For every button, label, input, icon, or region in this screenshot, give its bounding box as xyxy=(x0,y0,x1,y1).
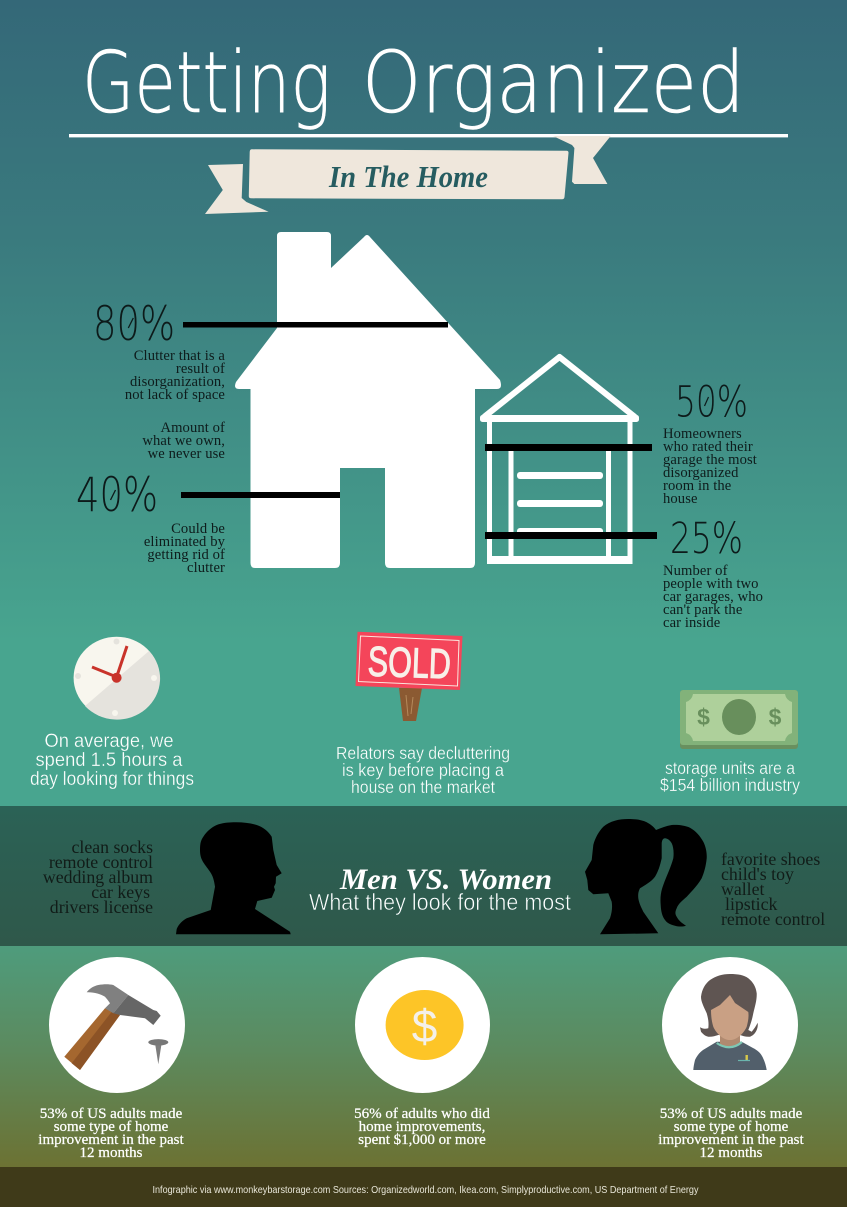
stat: 25% xyxy=(485,514,763,631)
text: storage units: storage units are a xyxy=(665,758,795,778)
stat: 40% xyxy=(76,468,340,576)
stat: 50%: who rated their xyxy=(663,439,753,455)
list: women look for: lipstick xyxy=(725,894,777,914)
stat: 50%: Homeowners xyxy=(663,426,742,442)
stat: 40%: clutter xyxy=(187,560,225,576)
icon: woman silhouette xyxy=(585,819,707,934)
caption: home improvement repeat: 53% of US adults made xyxy=(660,1106,803,1122)
title: Getting xyxy=(82,34,331,133)
caption: home improvement: some type of home xyxy=(54,1119,169,1135)
stat: 80% xyxy=(93,297,448,403)
list: women look for: favorite shoes xyxy=(721,849,820,869)
footer xyxy=(0,1167,847,1207)
text: relators xyxy=(336,743,510,797)
caption: home improvement repeat: 12 months xyxy=(700,1145,763,1161)
stat: 40%: Could be xyxy=(171,521,225,537)
list: women look for: child's toy xyxy=(721,864,794,884)
icon: man silhouette xyxy=(176,822,291,934)
stat: 50%: disorganized xyxy=(663,465,739,481)
panel: men vs women xyxy=(0,806,847,946)
list: women look for: wallet xyxy=(721,879,765,899)
list: men look for: remote control xyxy=(49,852,153,872)
stat: 25%: can't park the xyxy=(663,602,742,618)
caption: home improvement: improvement in the past xyxy=(38,1132,185,1148)
text: storage units: $154 billion industry xyxy=(660,775,800,795)
text: relators: house on the market xyxy=(351,777,495,797)
caption: home improvement repeat xyxy=(658,1106,805,1161)
subheading: What they look for the most xyxy=(309,889,572,915)
note: amount we never use: what we own, xyxy=(142,433,225,449)
note: amount we never use: Amount of xyxy=(160,420,225,436)
stat: 50%: 50% xyxy=(675,378,748,428)
stat: 40%: 40% xyxy=(76,468,158,523)
text: time spent looking xyxy=(30,731,194,790)
title underline xyxy=(69,134,788,137)
caption: spending: spent $1,000 or more xyxy=(358,1132,486,1148)
icon: sold sign xyxy=(356,632,462,721)
title: Organized xyxy=(362,34,745,133)
caption: home improvement xyxy=(38,1106,185,1161)
stat: 80%: not lack of space xyxy=(125,387,225,403)
stat: 25%: Number of xyxy=(663,563,728,579)
list: men look for xyxy=(43,837,153,917)
icon: dollar bill: $ xyxy=(769,704,782,730)
note: amount we never use: we never use xyxy=(148,446,225,462)
heading: men vs women: Men VS. Women xyxy=(339,863,552,896)
icon: dollar bill xyxy=(680,690,798,749)
icon: hammer and nail xyxy=(49,957,185,1093)
footer: Infographic via www.monkeybarstorage.com Sources: Organizedworld.com, Ikea.com, Simplyproductive.com, US Department of Energy xyxy=(152,1184,699,1196)
caption: spending: 56% of adults who did xyxy=(354,1106,490,1122)
stat: 40%: eliminated by xyxy=(144,534,226,550)
text: storage units xyxy=(660,758,800,795)
caption: spending: home improvements, xyxy=(359,1119,485,1135)
ribbon: In The Home: In The Home xyxy=(328,159,488,194)
caption: home improvement: 53% of US adults made xyxy=(40,1106,183,1122)
list: women look for xyxy=(721,849,825,929)
icon: clock xyxy=(74,637,160,720)
icon: coin: $ xyxy=(412,1000,437,1052)
stat: 50%: room in the xyxy=(663,478,731,494)
note: amount we never use xyxy=(142,420,225,462)
caption: home improvement: 12 months xyxy=(80,1145,143,1161)
stat: 80%: disorganization, xyxy=(130,374,225,390)
icon: coin xyxy=(355,957,490,1093)
text: time spent looking: On average, we xyxy=(44,731,174,752)
stat: 80%: Clutter that is a xyxy=(134,348,225,364)
list: men look for: drivers license xyxy=(50,897,153,917)
icon: dollar bill: $ xyxy=(697,704,710,730)
stat: 25%: people with two xyxy=(663,576,759,592)
caption: home improvement repeat: some type of home xyxy=(674,1119,789,1135)
list: men look for: wedding album xyxy=(43,867,153,887)
stat: 50%: garage the most xyxy=(663,452,757,468)
list: men look for: car keys xyxy=(91,882,150,902)
stat: 80%: result of xyxy=(176,361,225,377)
ribbon: In The Home xyxy=(205,136,611,214)
title xyxy=(82,34,745,133)
text: time spent looking: day looking for things xyxy=(30,769,194,790)
list: women look for: remote control xyxy=(721,909,825,929)
list: men look for: clean socks xyxy=(72,837,153,857)
caption: home improvement repeat: improvement in the past xyxy=(658,1132,805,1148)
text: time spent looking: spend 1.5 hours a xyxy=(36,750,183,771)
stat: 50% xyxy=(485,378,757,507)
stat: 40%: getting rid of xyxy=(147,547,225,563)
stat: 25%: 25% xyxy=(670,514,743,564)
icon: garage xyxy=(480,357,639,562)
stat: 25%: car inside xyxy=(663,615,720,631)
stat: 50%: house xyxy=(663,491,698,507)
icon: sold sign: SOLD xyxy=(367,638,452,687)
caption: spending xyxy=(354,1106,490,1148)
text: relators: is key before placing a xyxy=(342,760,504,780)
icon: woman portrait xyxy=(662,957,798,1093)
text: relators: Relators say decluttering xyxy=(336,743,510,763)
stat: 80%: 80% xyxy=(93,297,175,352)
icon: house xyxy=(235,232,501,568)
stat: 25%: car garages, who xyxy=(663,589,763,605)
